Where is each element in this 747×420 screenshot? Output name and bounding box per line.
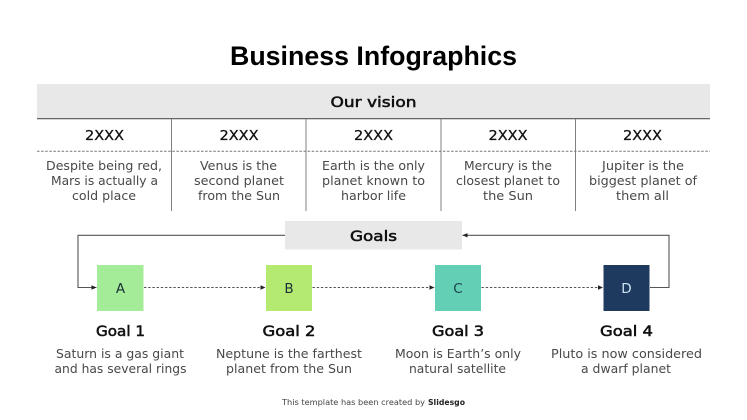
goal 4: D	[621, 281, 632, 297]
goal 1	[54, 265, 186, 376]
column 4: 2XXX	[488, 129, 528, 144]
panel: goals	[54, 221, 702, 376]
vision heading: Our vision	[330, 95, 416, 111]
column 4	[456, 129, 560, 203]
column 4: Mercury is the	[464, 159, 552, 173]
column 5	[589, 129, 698, 203]
column 1: cold place	[72, 189, 136, 203]
goal 2	[216, 265, 362, 376]
goal 1: A	[116, 281, 126, 297]
column 1: Despite being red,	[46, 159, 162, 173]
goal 4: Goal 4	[600, 324, 653, 340]
arrow: A to B	[144, 286, 266, 288]
column 5: them all	[616, 189, 669, 203]
panel: our vision	[37, 84, 710, 211]
goal 3: C	[453, 281, 463, 297]
column 3	[322, 129, 425, 203]
goal 4	[551, 265, 702, 376]
column 3: Earth is the only	[322, 159, 425, 173]
goal 1: Goal 1	[96, 324, 145, 340]
arrow: B to C	[312, 286, 434, 288]
goal 3: Goal 3	[432, 324, 484, 340]
column 1: 2XXX	[85, 129, 124, 144]
goal 2: planet from the Sun	[226, 362, 352, 376]
column 5: 2XXX	[623, 129, 662, 144]
column 2: from the Sun	[198, 189, 280, 203]
footer credit: This template has been created by	[281, 398, 426, 407]
column 1	[46, 129, 162, 203]
column 2: second planet	[194, 174, 284, 188]
arrow: goals to A	[78, 235, 285, 288]
column 5: biggest planet of	[589, 174, 698, 188]
column 2	[194, 129, 284, 203]
goal 2: B	[284, 281, 294, 297]
column 2: 2XXX	[220, 129, 259, 144]
arrow: C to D	[482, 286, 603, 288]
column 1: Mars is actually a	[51, 174, 158, 188]
vision header band	[37, 84, 710, 118]
goal 1: and has several rings	[54, 362, 186, 376]
column 4: the Sun	[483, 189, 533, 203]
goal 4: a dwarf planet	[581, 362, 671, 376]
goals header box	[285, 221, 462, 250]
arrow: D to goals	[462, 235, 669, 288]
goal 2: Goal 2	[262, 324, 316, 340]
column 5: Jupiter is the	[601, 159, 684, 173]
column 4: closest planet to	[456, 174, 560, 188]
column 3: planet known to	[322, 174, 425, 188]
goal 3: Moon is Earth’s only	[395, 347, 521, 361]
column 3: harbor life	[341, 189, 406, 203]
goal 2: Neptune is the farthest	[216, 347, 362, 361]
goal 3: natural satellite	[409, 362, 506, 376]
goals heading: Goals	[350, 229, 397, 245]
title: Business Infographics	[230, 41, 517, 71]
column 3: 2XXX	[354, 129, 393, 144]
goal 1: Saturn is a gas giant	[56, 347, 184, 361]
goal 4: Pluto is now considered	[551, 347, 702, 361]
footer credit: Slidesgo	[428, 398, 465, 407]
goal 3	[395, 265, 521, 376]
column 2: Venus is the	[200, 159, 277, 173]
